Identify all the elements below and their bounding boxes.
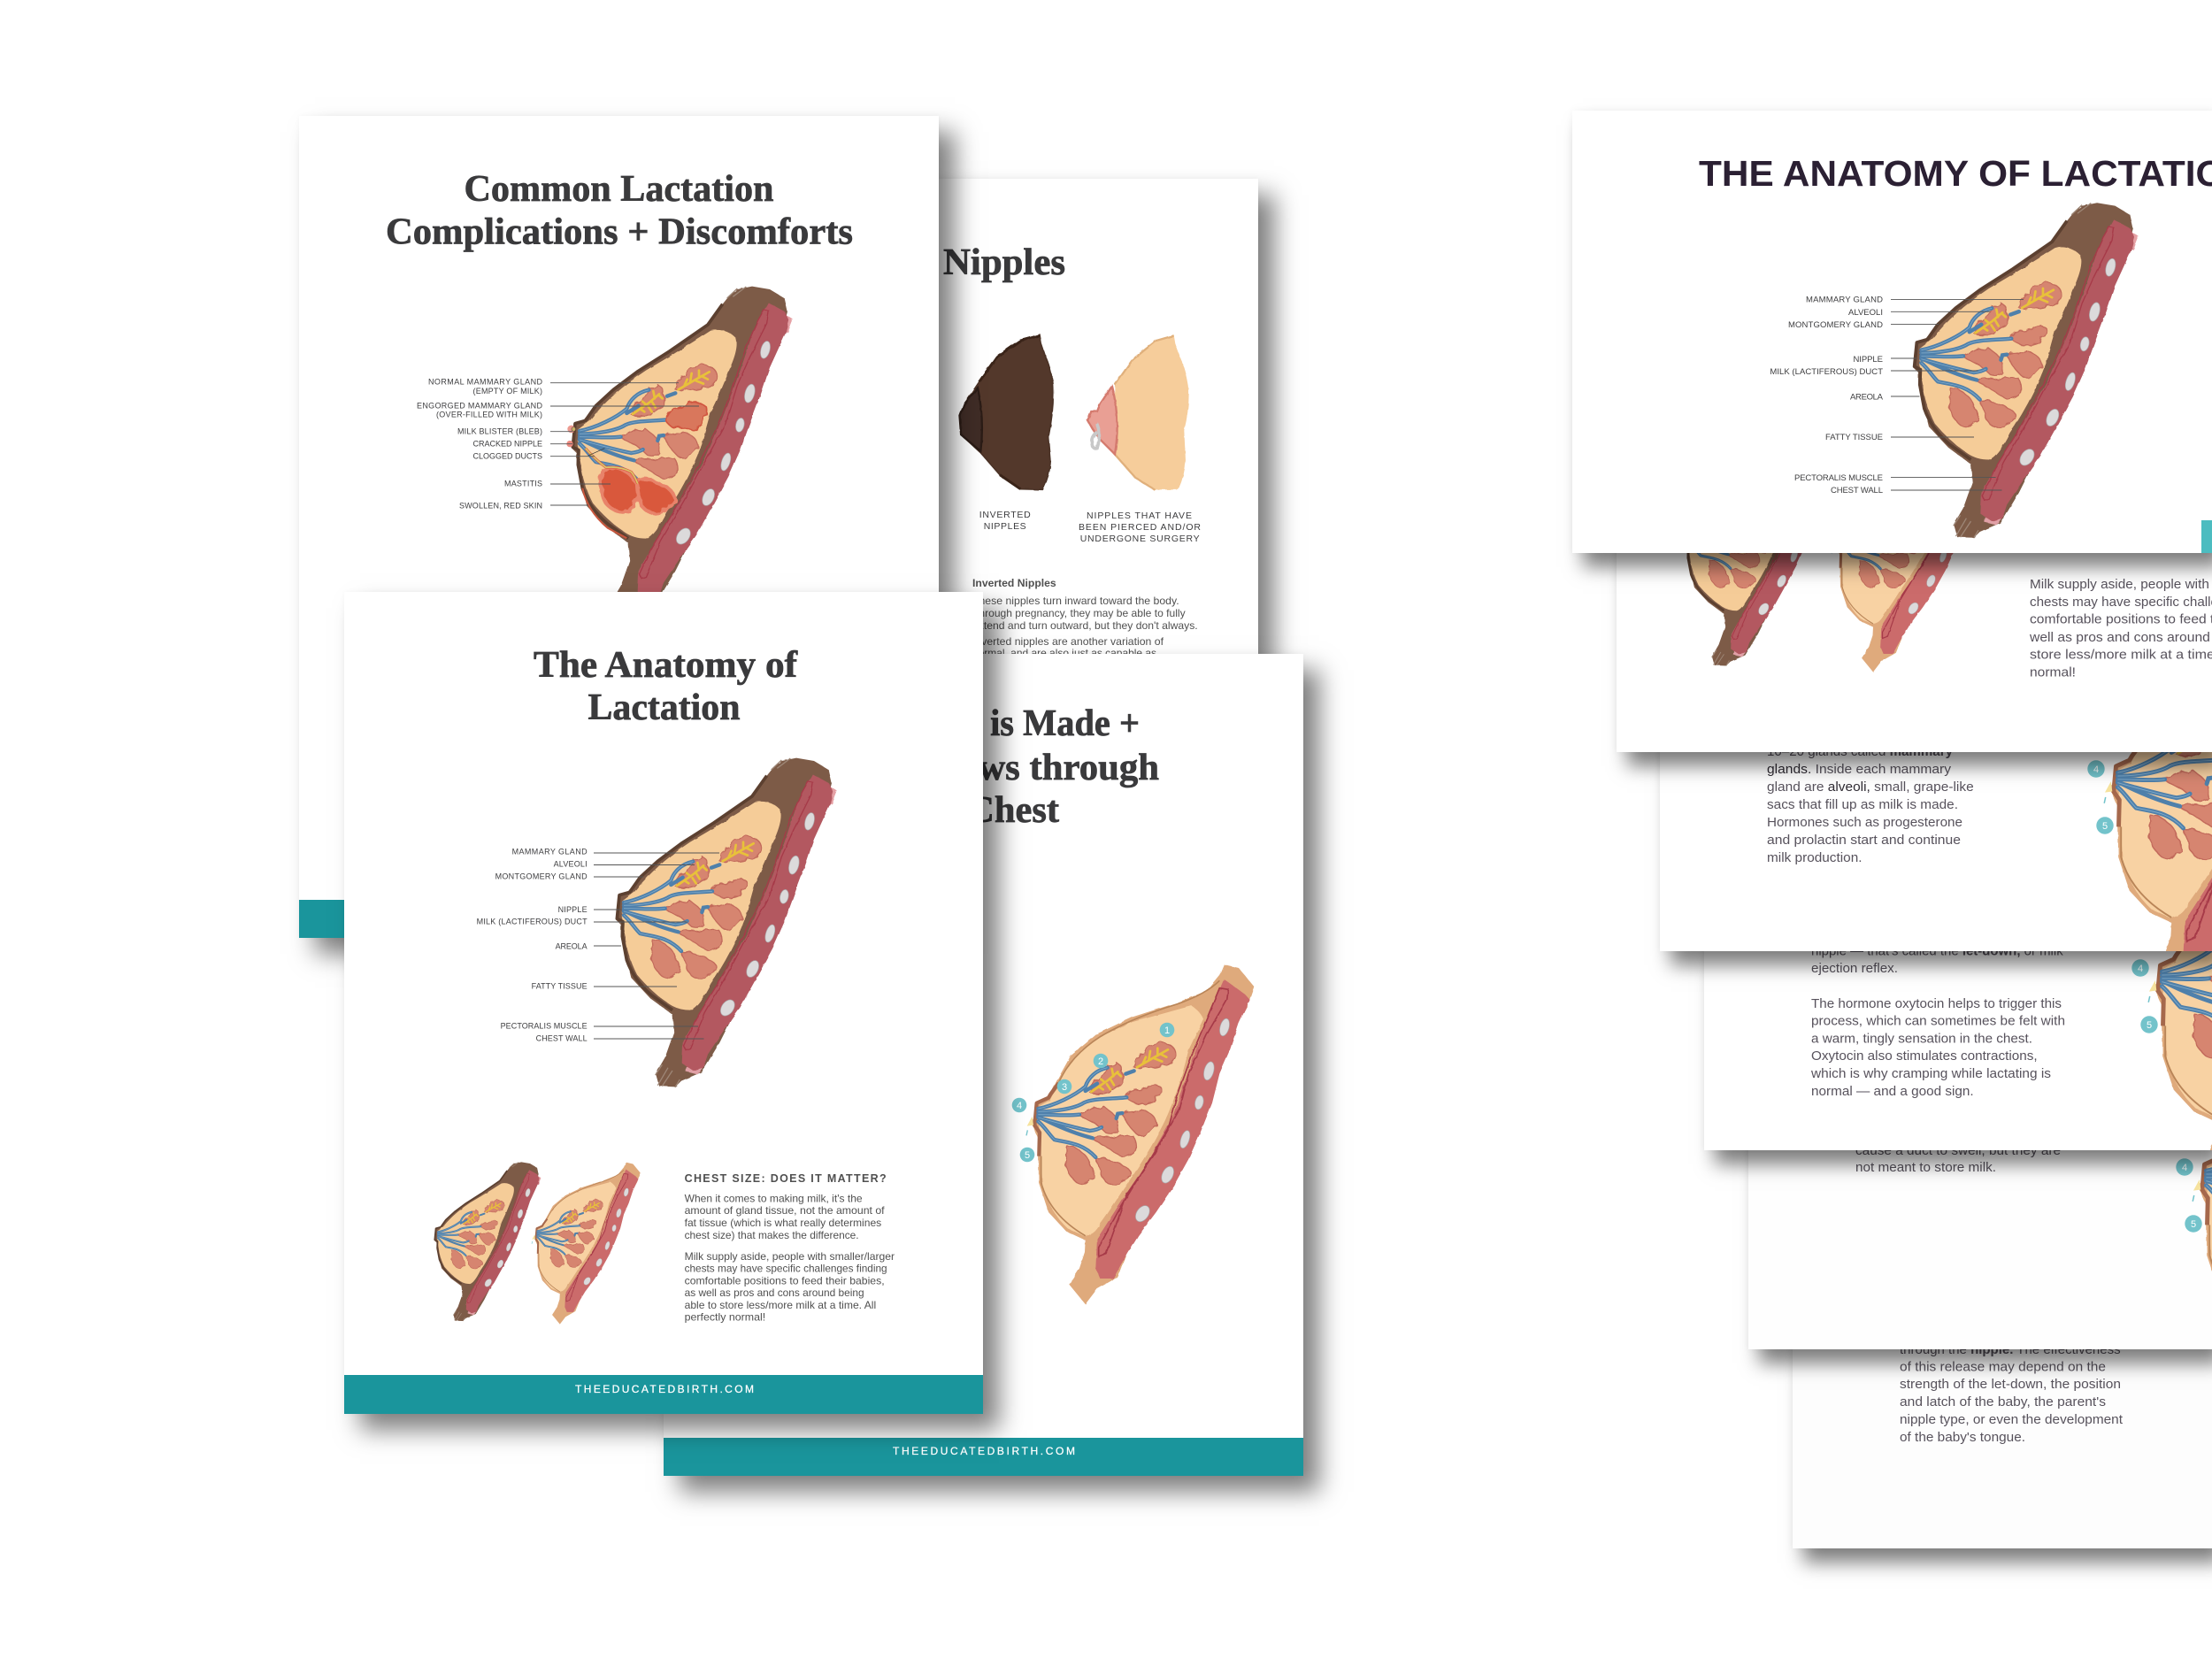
panel: right stack sheet 3	[1660, 509, 2212, 951]
text block: glands	[1767, 744, 1974, 865]
labels: NIPPLE	[558, 905, 588, 914]
text block: chest size: comfortable positions to feed their babies,	[685, 1275, 885, 1287]
labels: MONTGOMERY GLAND	[1788, 320, 1883, 330]
text block: milk release: of the baby's tongue.	[1900, 1430, 2025, 1445]
panel: right stack sheet 2	[1617, 310, 2212, 752]
labels: (OVER-FILLED WITH MILK)	[436, 411, 542, 419]
title: how milk is made: the Chest	[908, 790, 1059, 831]
heading: Nipples: Nipples	[943, 242, 1065, 283]
text block: let-down: which is why cramping while lactating is	[1810, 1066, 2051, 1081]
text block: chest size: amount of gland tissue, not the amount of	[685, 1204, 885, 1217]
numbered badges: 2	[1098, 1056, 1103, 1067]
title: common lactation complications	[386, 169, 853, 253]
panel: right stack sheet 5	[1748, 907, 2212, 1349]
illustration: smaller chest	[1684, 429, 1842, 666]
text block: inverted nipples: Inverted Nipples	[972, 577, 1056, 589]
text block: ducts	[1855, 1143, 2061, 1175]
caption: pierced nipples: UNDERGONE SURGERY	[1080, 534, 1200, 544]
labels: MAMMARY GLAND	[512, 848, 588, 856]
text block: chest size: chests may have specific challenges finding	[685, 1263, 887, 1275]
text block: glands: milk production.	[1767, 850, 1862, 865]
text block: inverted nipples: These nipples turn inward toward the body.	[972, 595, 1179, 607]
illustration: breast cross-section with complications	[566, 287, 793, 615]
title: how milk is made: How it Flows through	[808, 748, 1159, 788]
text block: milk release: through the nipple. The effectiveness	[1900, 1342, 2121, 1357]
text block: inverted nipples: extend and turn outward, but they don't always.	[972, 619, 1198, 632]
numbered badges	[2087, 760, 2114, 834]
footer band: THEEDUCATEDBIRTH.COM	[893, 1445, 1075, 1457]
text block: ducts: cause a duct to swell, but they are	[1855, 1143, 2061, 1158]
illustration: smaller chest	[434, 1162, 541, 1321]
text block: glands: 10–20 glands called mammary	[1767, 744, 1954, 759]
labels	[477, 848, 588, 1042]
numbered badges: 3	[1062, 1082, 1067, 1093]
labels: AREOLA	[556, 941, 588, 950]
panel: right stack sheet 4	[1704, 708, 2212, 1150]
label lines	[1891, 299, 2024, 490]
illustration: milk flow cross-section	[2104, 608, 2212, 995]
panel: anatomy of lactation sheet	[344, 592, 983, 1414]
labels: NORMAL MAMMARY GLAND	[428, 377, 543, 386]
text block: let-down: a warm, tingly sensation in the chest.	[1811, 1032, 2032, 1046]
labels: MAMMARY GLAND	[1806, 296, 1883, 305]
text block: let-down	[1810, 943, 2065, 1099]
caption: inverted nipples: INVERTED	[979, 510, 1031, 520]
illustration: breast cross-section	[617, 758, 837, 1087]
caption: inverted nipples: NIPPLES	[984, 521, 1026, 532]
labels	[1770, 296, 1884, 495]
text block: chest size: When it comes to making milk, it's the	[685, 1193, 863, 1205]
footer band	[2201, 520, 2212, 553]
text block: let-down: Oxytocin also stimulates contractions,	[1811, 1048, 2038, 1064]
labels: CHEST WALL	[1831, 486, 1883, 495]
text block: milk release	[1900, 1342, 2124, 1445]
title: how milk is made	[808, 703, 1159, 831]
text block: chest size: chest size) that makes the difference.	[685, 1229, 859, 1241]
text block: milk release: of this release may depend on the	[1900, 1359, 2106, 1374]
labels: (EMPTY OF MILK)	[472, 387, 542, 396]
numbered badges: 1	[1164, 1025, 1170, 1036]
title: the anatomy of lactation	[534, 645, 798, 728]
labels: PECTORALIS MUSCLE	[501, 1021, 588, 1030]
text block: glands: gland are alveoli, small, grape-like	[1767, 780, 1974, 795]
footer band	[344, 1375, 983, 1414]
illustration: breast cross-section	[1914, 203, 2139, 538]
footer band: THEEDUCATEDBIRTH.COM	[575, 1383, 754, 1395]
text block: chest size	[685, 1193, 895, 1324]
title: the anatomy of lactation: The Anatomy of	[534, 645, 798, 686]
numbered badges: 4	[2093, 764, 2099, 775]
text block: milk supply: normal!	[2030, 664, 2076, 680]
numbered badges: 5	[2102, 821, 2108, 832]
label lines	[550, 383, 699, 505]
title: common lactation complications: Complications + Discomforts	[386, 212, 853, 253]
numbered badges	[2176, 1158, 2202, 1233]
text block: chest size: able to store less/more milk at a time. All	[685, 1299, 876, 1311]
text block: inverted nipples: Inverted nipples are another variation of	[972, 635, 1164, 648]
text block: let-down: The hormone oxytocin helps to trigger this	[1811, 996, 2062, 1011]
text block: glands: and prolactin start and continue	[1767, 833, 1961, 848]
text block: glands: glands. Inside each mammary	[1767, 762, 1952, 777]
labels: MASTITIS	[504, 480, 542, 488]
title: common lactation complications: Common Lactation	[464, 169, 773, 210]
text block: inverted nipples: Through pregnancy, they may be able to fully	[972, 607, 1186, 619]
panel: right stack sheet 6	[1793, 1106, 2212, 1548]
panel: nipple types sheet	[618, 179, 1258, 975]
text block: milk release: strength of the let-down, the position	[1900, 1377, 2121, 1392]
labels: MILK (LACTIFEROUS) DUCT	[1770, 367, 1883, 377]
numbered badges	[1012, 1023, 1174, 1162]
illustration: pierced nipple	[1087, 334, 1189, 489]
numbered badges: 4	[2182, 1163, 2187, 1173]
labels: PECTORALIS MUSCLE	[1794, 473, 1883, 483]
illustration: milk flow cross-section	[1026, 964, 1254, 1304]
illustration: larger chest	[1832, 433, 1992, 672]
labels: ALVEOLI	[554, 860, 588, 869]
labels: CRACKED NIPPLE	[472, 439, 542, 448]
text block: let-down: normal — and a good sign.	[1811, 1084, 1974, 1099]
text block: chest size: fat tissue (which is what really determines	[685, 1217, 881, 1229]
illustration: inverted nipple	[960, 334, 1053, 489]
numbered badges: 4	[1017, 1101, 1022, 1111]
text block: glands: sacs that fill up as milk is made.	[1767, 797, 1958, 812]
caption: pierced nipples	[1079, 511, 1201, 544]
labels: SWOLLEN, RED SKIN	[459, 501, 542, 510]
labels: MILK BLISTER (BLEB)	[457, 426, 542, 435]
text block: glands: Hormones such as progesterone	[1767, 815, 1962, 830]
illustration: milk flow cross-section	[2148, 807, 2212, 1194]
footer band	[664, 1438, 1303, 1476]
labels	[417, 377, 543, 510]
text block: milk release: nipple type, or even the development	[1900, 1412, 2124, 1427]
text block: milk release: and latch of the baby, the parent's	[1900, 1394, 2106, 1409]
labels: FATTY TISSUE	[1825, 433, 1883, 442]
footer band	[299, 900, 939, 938]
caption: pierced nipples: BEEN PIERCED AND/OR	[1079, 522, 1201, 533]
text block: inverted nipples	[972, 577, 1198, 659]
text block: let-down: process, which can sometimes be felt with	[1811, 1014, 2065, 1029]
text block: chest size: as well as pros and cons around being	[685, 1286, 864, 1299]
heading: chest size: CHEST SIZE: DOES IT MATTER?	[685, 1172, 887, 1185]
numbered badges: 4	[2138, 964, 2143, 974]
caption: inverted nipples	[979, 510, 1031, 532]
title: how milk is made: How Milk is Made +	[827, 703, 1140, 744]
labels: ALVEOLI	[1848, 308, 1883, 318]
text block: milk supply	[2029, 577, 2212, 680]
text block: chest size: Milk supply aside, people with smaller/larger	[685, 1250, 895, 1263]
illustration: milk flow cross-section	[2193, 1006, 2212, 1394]
numbered badges: 5	[1025, 1150, 1030, 1161]
numbered badges: 5	[2147, 1020, 2152, 1031]
labels: ENGORGED MAMMARY GLAND	[417, 402, 543, 411]
panel: complications sheet	[299, 116, 939, 938]
title: the anatomy of lactation: Lactation	[588, 687, 740, 728]
labels: AREOLA	[1850, 392, 1884, 402]
labels: CLOGGED DUCTS	[472, 451, 542, 460]
labels: MONTGOMERY GLAND	[495, 872, 588, 881]
panel: how milk is made sheet	[664, 654, 1303, 1476]
text block: inverted nipples: normal, and are also just as capable as	[972, 647, 1156, 659]
text block: chest size: perfectly normal!	[685, 1311, 765, 1324]
caption: pierced nipples: NIPPLES THAT HAVE	[1087, 511, 1192, 521]
labels: FATTY TISSUE	[532, 982, 588, 991]
text block: let-down: nipple — that's called the let-down, or milk	[1811, 943, 2063, 959]
panel: right stack sheet 1	[1572, 111, 2212, 553]
illustration: larger chest	[532, 1163, 641, 1325]
labels: CHEST WALL	[536, 1033, 588, 1042]
labels: MILK (LACTIFEROUS) DUCT	[477, 917, 588, 926]
label lines	[594, 853, 719, 1039]
text block: ducts: not meant to store milk.	[1855, 1160, 1996, 1175]
text block: let-down: ejection reflex.	[1811, 961, 1898, 976]
labels: NIPPLE	[1853, 355, 1883, 365]
numbered badges	[2131, 959, 2158, 1033]
numbered badges: 5	[2191, 1219, 2196, 1230]
